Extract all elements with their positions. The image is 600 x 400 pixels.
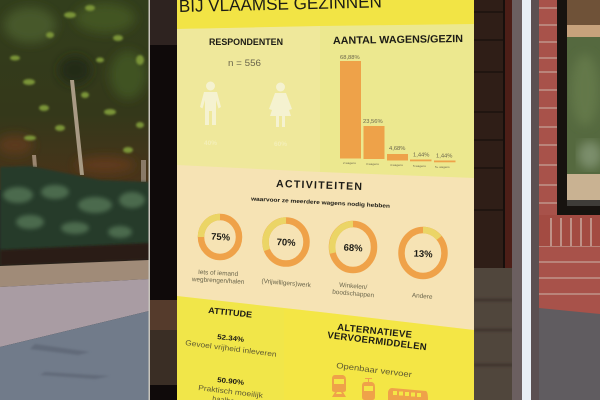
donut: 75%: 75% xyxy=(211,232,231,244)
label: 75%: Iets of iemand xyxy=(198,269,239,278)
panel: attitude xyxy=(177,296,284,400)
panel: respondenten xyxy=(177,26,320,172)
bar chart xyxy=(340,55,456,169)
stat: gevoel vrijheid inleveren: Gevoel vrijheid inleveren xyxy=(185,338,277,359)
background: brick wall xyxy=(539,0,600,314)
stat: praktisch moeilijk haalbaar: Praktisch moeilijk xyxy=(198,383,264,400)
stat: praktisch moeilijk haalbaar xyxy=(198,377,264,400)
label: 68%: Winkelen/ xyxy=(339,282,368,291)
bar chart: 4,68% xyxy=(389,146,405,152)
icon: train xyxy=(332,375,346,397)
donut: 70% xyxy=(266,220,306,264)
donut: 13% xyxy=(402,230,444,276)
label: male share: 40% xyxy=(204,140,217,147)
donut: 75% xyxy=(201,217,239,257)
donut: 68%: 68% xyxy=(343,243,363,255)
donut: 70%: 70% xyxy=(276,237,296,249)
bar chart: 5+ wagens xyxy=(435,165,450,169)
heading: attitude: ATTITUDE xyxy=(208,305,253,320)
label: 68% xyxy=(332,282,375,299)
background: trees and foliage xyxy=(0,0,150,190)
icon: bus xyxy=(388,388,428,400)
display: black board xyxy=(148,0,179,400)
bar chart: 2 wagens xyxy=(343,161,356,165)
bar chart: 1,44% xyxy=(436,154,452,160)
background: paving stones xyxy=(0,311,149,400)
label: 68%: boodschappen xyxy=(332,289,375,299)
label: 70%: (Vrijwilligers)werk xyxy=(261,278,312,289)
heading: aantal wagens/gezin: AANTAL WAGENS/GEZIN xyxy=(333,33,463,47)
panel: aantal wagens per gezin xyxy=(320,24,474,178)
display: metal post xyxy=(512,0,539,400)
subheading: waarvoor ze meerdere wagens nodig hebben xyxy=(250,196,391,210)
panel: activiteiten xyxy=(177,165,474,330)
icon: female figure xyxy=(269,82,292,127)
poster: yellow title band xyxy=(177,0,474,29)
stat: gevoel vrijheid inleveren xyxy=(185,334,277,359)
bar chart: 68,88% xyxy=(340,55,360,61)
background: curb xyxy=(0,260,149,287)
text: sample size: n = 556 xyxy=(228,58,261,69)
stat: praktisch moeilijk haalbaar: 50.90% xyxy=(217,377,245,387)
donut: 13%: 13% xyxy=(413,249,433,261)
bar chart: 4 wagens xyxy=(390,163,403,167)
text: openbaar vervoer: Openbaar vervoer xyxy=(336,361,413,379)
heading: alternatieve vervoermiddelen: VERVOERMIDDELEN xyxy=(327,330,427,353)
heading: activiteiten: ACTIVITEITEN xyxy=(276,178,363,193)
poster xyxy=(177,0,474,400)
background: pavement right xyxy=(539,308,600,400)
background: window xyxy=(557,0,600,215)
background: reflected pavement xyxy=(474,268,513,400)
heading: alternatieve vervoermiddelen: ALTERNATIEVE xyxy=(337,322,412,341)
label: 75%: wegbrengen/halen xyxy=(191,276,245,286)
icon: male figure xyxy=(200,82,221,125)
label: 75% xyxy=(191,269,245,286)
label: female share: 60% xyxy=(274,141,287,148)
bar chart: 1,44% xyxy=(413,152,429,158)
heading: respondenten: RESPONDENTEN xyxy=(209,37,283,48)
stat: gevoel vrijheid inleveren: 52.34% xyxy=(217,334,245,344)
bar chart: 23,56% xyxy=(363,119,383,125)
panel: alternatieve vervoermiddelen xyxy=(284,308,474,400)
label: 13%: Andere xyxy=(412,292,433,301)
bar chart: 3 wagens xyxy=(366,162,379,166)
donut: 68% xyxy=(332,224,374,270)
icon: tram xyxy=(362,378,375,400)
background: hedge xyxy=(0,166,150,266)
background: sidewalk xyxy=(0,279,149,347)
bar chart: 5 wagens xyxy=(413,164,426,168)
background: dark wood wall xyxy=(474,0,513,268)
